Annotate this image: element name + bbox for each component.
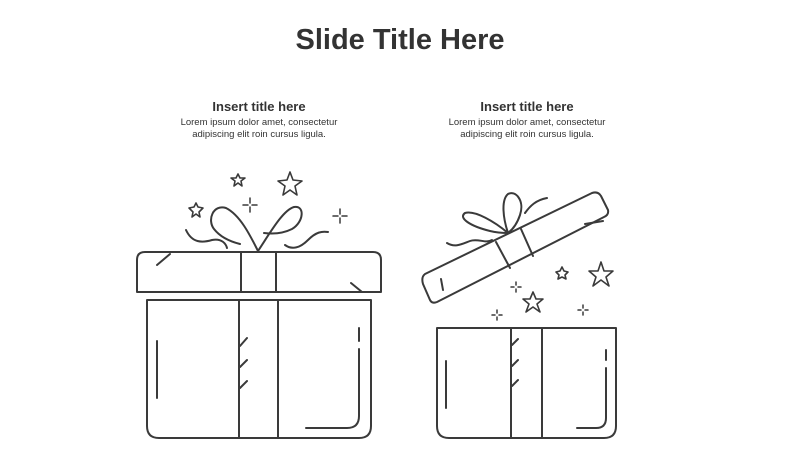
- text block: right: adipiscing elit roin cursus ligula.: [460, 129, 594, 140]
- title: Slide Title Here: [296, 24, 504, 56]
- icon: open gift: [422, 192, 616, 438]
- text block: right: Insert title here: [480, 99, 574, 114]
- text block: right: [449, 99, 606, 140]
- icon: closed gift: [137, 172, 381, 438]
- text block: left: adipiscing elit roin cursus ligula.: [192, 129, 326, 140]
- text block: left: Lorem ipsum dolor amet, consectetur: [181, 117, 337, 128]
- text block: right: Lorem ipsum dolor amet, consectetur: [449, 117, 605, 128]
- text block: left: [181, 99, 338, 140]
- text block: left: Insert title here: [212, 99, 306, 114]
